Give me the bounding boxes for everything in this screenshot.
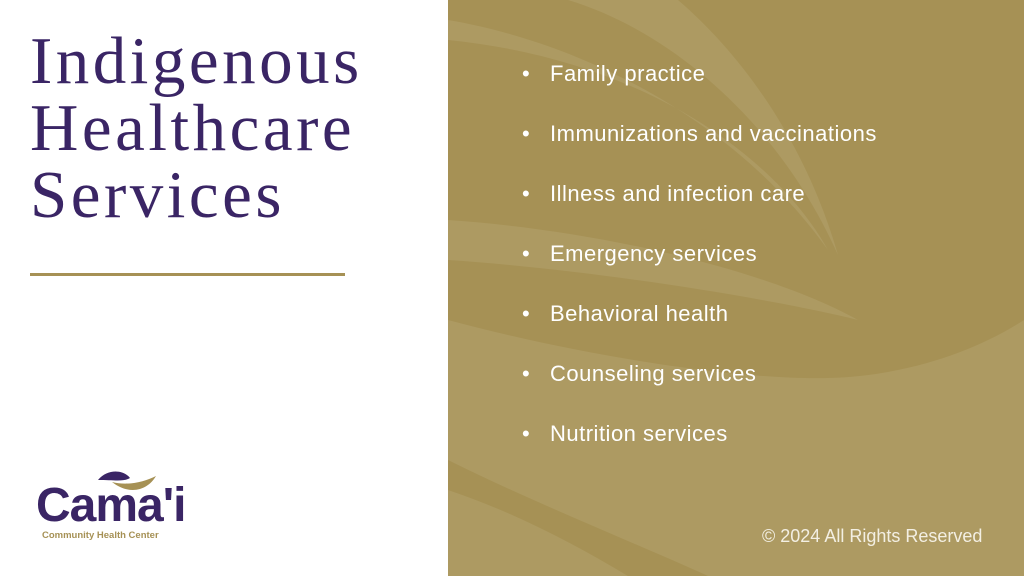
bullet list: services: •	[522, 121, 530, 146]
title: Healthcare	[30, 91, 355, 165]
logo: Camai: Community Health Center	[42, 530, 159, 541]
footer: copyright: © 2024 All Rights Reserved	[762, 526, 982, 546]
bullet list: services: •	[522, 61, 530, 86]
panel: right services panel: Behavioral health	[550, 301, 729, 326]
icon: logo swoosh	[98, 472, 156, 490]
panel: right services panel: Nutrition services	[550, 421, 728, 446]
title	[30, 24, 363, 232]
panel: right services panel	[448, 0, 1024, 576]
bullet list: services: •	[522, 361, 530, 386]
bullet list: services: •	[522, 301, 530, 326]
logo: Camai: Cama'i	[36, 479, 185, 532]
panel: right services panel: Illness and infection care	[550, 181, 805, 206]
title: Services	[30, 158, 285, 232]
bullet list: services	[522, 61, 877, 446]
panel: right services panel: Counseling services	[550, 361, 756, 386]
bullet list: services: •	[522, 241, 530, 266]
panel: right services panel: Emergency services	[550, 241, 757, 266]
panel: right services panel: Immunizations and vaccinations	[550, 121, 877, 146]
bullet list: services: •	[522, 181, 530, 206]
panel: right services panel: Family practice	[550, 61, 705, 86]
title: Indigenous	[30, 24, 363, 98]
bullet list: services: •	[522, 421, 530, 446]
